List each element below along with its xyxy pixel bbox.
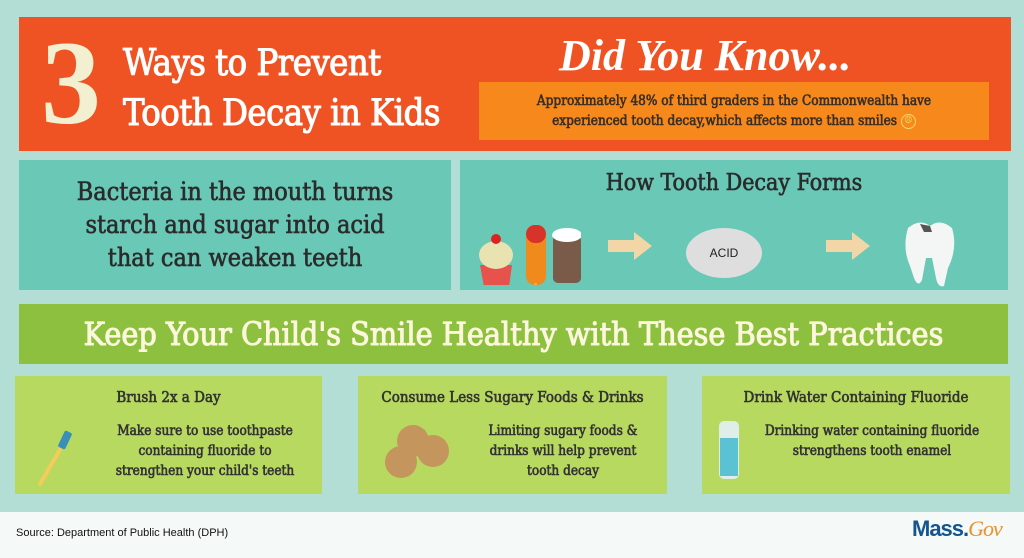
footer [0, 512, 1024, 558]
panel: bacteria: starch and sugar into acid [85, 210, 385, 239]
arrow 2 [826, 232, 870, 260]
panel heading: How Tooth Decay Forms [606, 170, 862, 196]
icon: decayed tooth [905, 222, 954, 286]
card text: Drinking water containing fluoride strengthens tooth enamel [765, 423, 979, 459]
fact box: experienced tooth decay,which affects more than smiles [552, 113, 897, 129]
acid ellipse: ACID [710, 246, 738, 260]
fact box: Approximately 48% of third graders in the Commonwealth have [537, 93, 931, 109]
panel: bacteria: Bacteria in the mouth turns [77, 177, 393, 206]
fact box [479, 82, 989, 140]
card text: Limiting sugary foods & drinks will help prevent tooth decay [489, 423, 637, 479]
panel: bacteria [19, 160, 451, 290]
card heading: Brush 2x a Day [116, 388, 221, 406]
green band heading: Keep Your Child's Smile Healthy with These Best Practices [84, 315, 943, 353]
fact box: ☹ [904, 115, 912, 126]
icon: toothbrush [38, 430, 72, 486]
title [122, 43, 440, 134]
card: brush [15, 376, 322, 494]
logo: Mass.Gov: Mass.Gov [912, 516, 1002, 541]
arrow 1 [608, 232, 652, 260]
green band heading [19, 304, 1008, 364]
did you know heading: Did You Know... [559, 31, 851, 80]
icon: glass [719, 421, 739, 479]
header banner [19, 17, 1011, 151]
icon: sweets [479, 225, 581, 285]
icon: cookies [385, 425, 449, 478]
title: Ways to Prevent [123, 43, 381, 84]
panel: bacteria: that can weaken teeth [108, 243, 362, 272]
card heading: Consume Less Sugary Foods & Drinks [381, 388, 644, 406]
card heading: Drink Water Containing Fluoride [744, 388, 968, 406]
card: sugary foods [358, 376, 667, 494]
card text: Make sure to use toothpaste containing fluoride to strengthen your child's teeth [116, 423, 294, 479]
card: fluoride water [702, 376, 1010, 494]
panel: how tooth decay forms [460, 160, 1008, 290]
big number 3: 3 [41, 16, 101, 149]
title: Tooth Decay in Kids [123, 93, 440, 134]
source text: Source: Department of Public Health (DPH) [16, 527, 228, 539]
acid ellipse [686, 228, 762, 278]
